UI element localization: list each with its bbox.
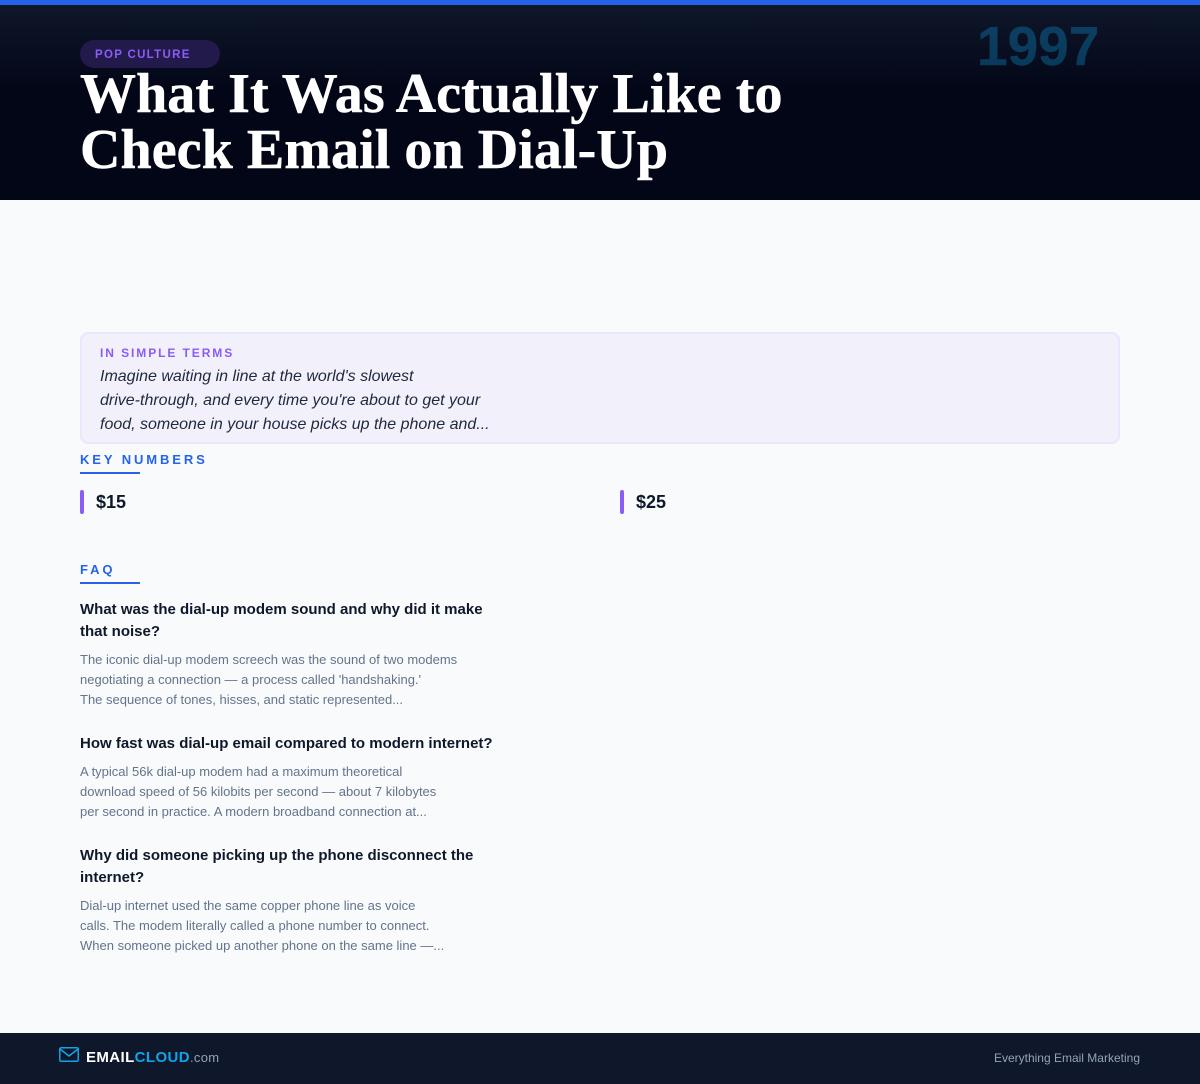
category pill xyxy=(80,40,220,68)
header banner xyxy=(0,0,1200,200)
title xyxy=(80,63,783,181)
FAQ answer 2: download speed of 56 kilobits per second — about 7 kilobytes xyxy=(80,784,436,799)
FAQ question 1: What was the dial-up modem sound and why did it make xyxy=(80,601,483,618)
FAQ answer 3: calls. The modem literally called a phone number to connect. xyxy=(80,918,430,933)
callout text xyxy=(100,368,490,433)
callout text: Imagine waiting in line at the world's slowest xyxy=(100,368,413,385)
stat: $15 xyxy=(80,490,126,514)
stat: $25 xyxy=(620,490,666,514)
footer logo: EMAILCLOUD.com xyxy=(86,1049,219,1066)
section heading: FAQ: FAQ xyxy=(80,562,115,577)
icon: envelope xyxy=(59,1047,79,1062)
FAQ question 3: internet? xyxy=(80,869,144,886)
FAQ answer 3: When someone picked up another phone on the same line —... xyxy=(80,938,444,953)
FAQ answer 1 xyxy=(80,652,457,707)
FAQ answer 2 xyxy=(80,764,436,819)
footer tagline: Everything Email Marketing xyxy=(994,1051,1140,1065)
FAQ answer 3: Dial-up internet used the same copper phone line as voice xyxy=(80,898,415,913)
callout text: food, someone in your house picks up the phone and... xyxy=(100,416,490,433)
FAQ question 1: that noise? xyxy=(80,623,160,640)
FAQ answer 3 xyxy=(80,898,444,953)
FAQ answer 2: A typical 56k dial-up modem had a maximum theoretical xyxy=(80,764,402,779)
footer bar xyxy=(0,1033,1200,1084)
FAQ question 2: How fast was dial-up email compared to modern internet? xyxy=(80,735,493,752)
section heading: key numbers: KEY NUMBERS xyxy=(80,452,208,467)
FAQ answer 1: negotiating a connection — a process called 'handshaking.' xyxy=(80,672,421,687)
callout text: drive-through, and every time you're about to get your xyxy=(100,392,480,409)
callout label: IN SIMPLE TERMS xyxy=(100,346,234,360)
FAQ answer 1: The iconic dial-up modem screech was the sound of two modems xyxy=(80,652,457,667)
category pill: POP CULTURE xyxy=(95,49,191,61)
title: Check Email on Dial-Up xyxy=(80,119,668,181)
FAQ question 3: Why did someone picking up the phone disconnect the xyxy=(80,847,473,864)
year watermark: 1997 xyxy=(977,15,1099,77)
FAQ question 1 xyxy=(80,601,483,640)
stat: $15: $15 xyxy=(96,492,126,512)
callout: in simple terms xyxy=(80,332,1120,444)
stat: $25: $25 xyxy=(636,492,666,512)
FAQ question 3 xyxy=(80,847,473,886)
FAQ answer 1: The sequence of tones, hisses, and static represented... xyxy=(80,692,403,707)
FAQ answer 2: per second in practice. A modern broadband connection at... xyxy=(80,804,427,819)
title: What It Was Actually Like to xyxy=(80,63,783,125)
